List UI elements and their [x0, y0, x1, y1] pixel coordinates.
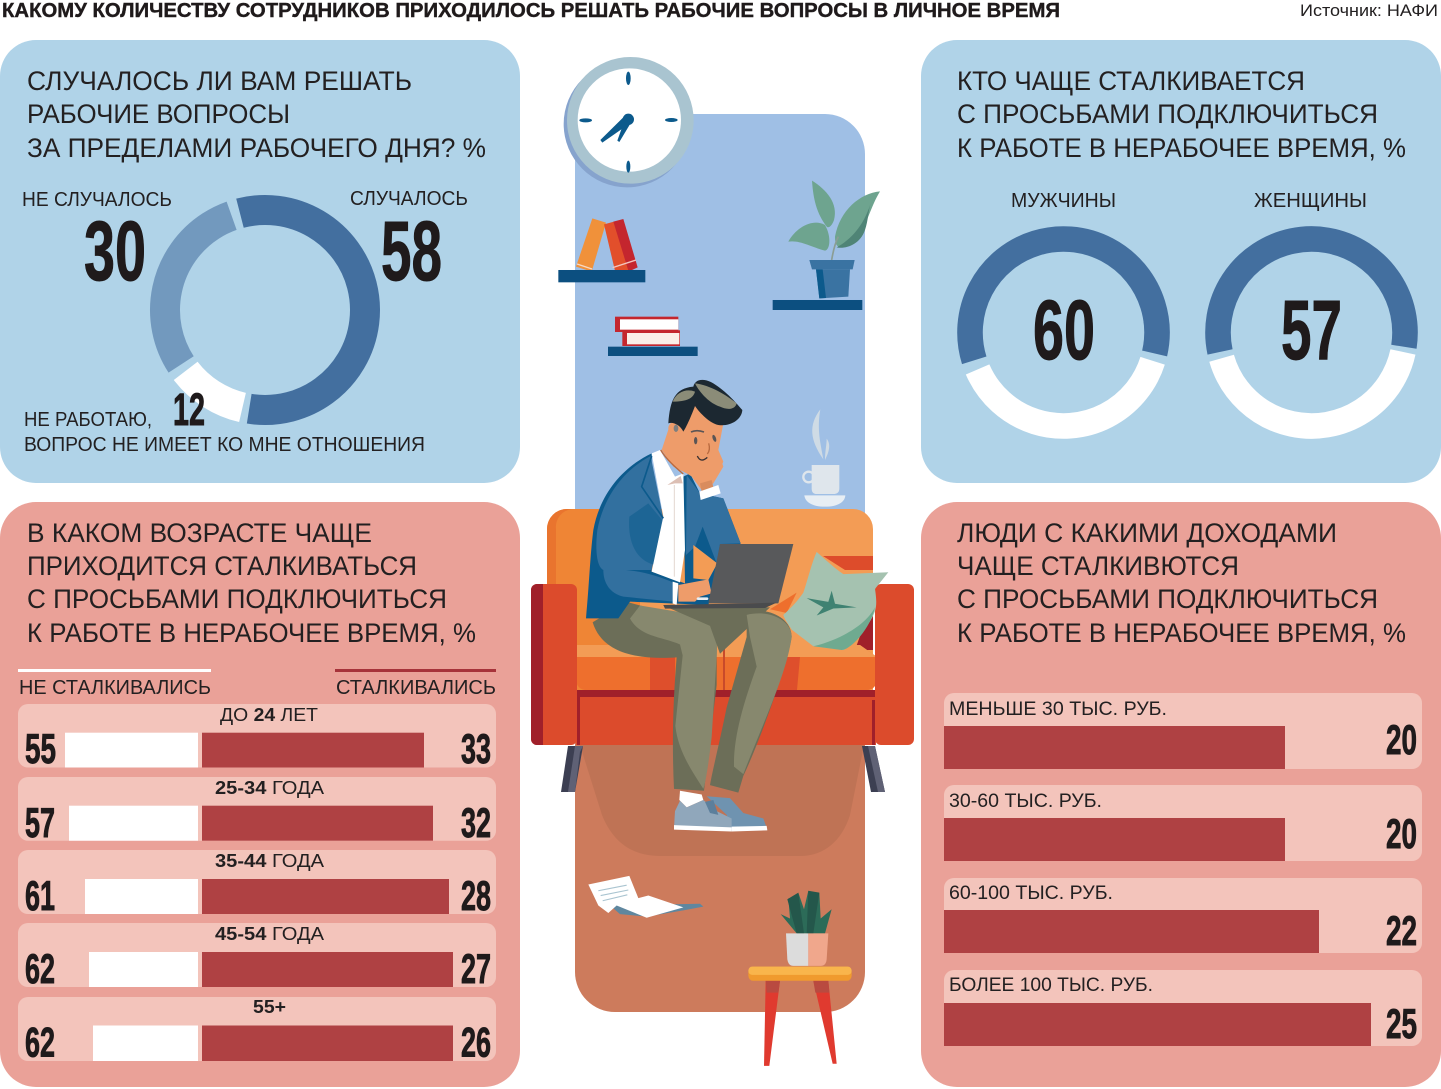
heading: panel question: С ПРОСЬБАМИ ПОДКЛЮЧИТЬСЯ — [27, 584, 447, 614]
donut chart: women 57 — [1201, 190, 1422, 443]
panel: by age — [0, 502, 520, 1087]
icon: stacked books on shelf — [608, 317, 698, 356]
hair — [668, 380, 742, 432]
sofa back — [547, 509, 873, 709]
heading: panel question — [957, 66, 1406, 163]
heading: panel question: ЗА ПРЕДЕЛАМИ РАБОЧЕГО ДНЯ? % — [27, 133, 486, 163]
row: over 100k: 25 — [1386, 1000, 1417, 1047]
row: 45-54 — [18, 923, 496, 992]
heading: panel question — [27, 518, 476, 648]
icon: sheets of paper on floor — [588, 876, 703, 918]
row: 25-34: 32 — [461, 799, 491, 846]
heading: panel question: К РАБОТЕ В НЕРАБОЧЕЕ ВРЕМЯ, % — [957, 618, 1406, 648]
heading: panel question: В КАКОМ ВОЗРАСТЕ ЧАЩЕ — [27, 518, 372, 548]
row: 30-60k: 20 — [1386, 810, 1417, 857]
label: not working 12 — [24, 384, 425, 456]
label: not working 12: НЕ РАБОТАЮ, — [24, 409, 152, 431]
man: legs and shoes — [593, 602, 792, 831]
row: under 24: 33 — [461, 725, 491, 772]
row: 55+: 26 — [461, 1018, 491, 1066]
donut chart: men 60: МУЖЧИНЫ — [1011, 190, 1116, 212]
row: 45-54: 62 — [25, 945, 55, 992]
sofa — [531, 509, 914, 792]
facial features — [694, 437, 697, 444]
row: 35-44 — [18, 850, 496, 919]
heading: panel question: ЛЮДИ С КАКИМИ ДОХОДАМИ — [957, 518, 1337, 548]
heading: panel question: КТО ЧАЩЕ СТАЛКИВАЕТСЯ — [957, 66, 1305, 96]
label: did not happen 30: НЕ СЛУЧАЛОСЬ — [22, 189, 172, 211]
illustration: man with laptop in a room — [531, 57, 914, 1066]
title: КАКОМУ КОЛИЧЕСТВУ СОТРУДНИКОВ ПРИХОДИЛОСЬ РЕШАТЬ РАБОЧИЕ ВОПРОСЫ В ЛИЧНОЕ ВРЕМЯ — [2, 0, 1060, 22]
row: under 30k: МЕНЬШЕ 30 ТЫС. РУБ. — [949, 699, 1167, 720]
row: 35-44: 28 — [461, 872, 491, 919]
icon: leaning books on shelf — [558, 218, 645, 282]
label: did not happen 30 — [22, 189, 172, 298]
heading: panel question: ПРИХОДИТСЯ СТАЛКИВАТЬСЯ — [27, 551, 417, 581]
row: under 24: 55 — [25, 725, 56, 772]
label: did not happen 30: 30 — [84, 204, 146, 298]
row: over 100k: БОЛЕЕ 100 ТЫС. РУБ. — [949, 975, 1153, 996]
floor shadow — [580, 745, 864, 856]
row: 35-44: 61 — [25, 872, 55, 919]
heading: panel question: ЧАЩЕ СТАЛКИВЮТСЯ — [957, 551, 1239, 581]
row: under 24 — [18, 704, 496, 772]
label: happened 58: 58 — [381, 204, 442, 298]
donut chart: men 60: 60 — [1033, 283, 1095, 377]
heading: panel question — [957, 518, 1406, 648]
row: 30-60k — [944, 785, 1422, 861]
wall decor — [558, 57, 880, 507]
label: not working 12: ВОПРОС НЕ ИМЕЕТ КО МНЕ ОТНОШЕНИЯ — [24, 434, 425, 456]
legs — [561, 746, 583, 792]
panel: who is asked more often, by gender — [921, 40, 1441, 483]
legend: СТАЛКИВАЛИСЬ — [336, 676, 496, 699]
heading: panel question: К РАБОТЕ В НЕРАБОЧЕЕ ВРЕМЯ, % — [957, 133, 1406, 163]
panel: by income — [921, 502, 1441, 1087]
lapel — [642, 456, 663, 518]
heading: panel question: РАБОЧИЕ ВОПРОСЫ — [27, 99, 290, 129]
legend: НЕ СТАЛКИВАЛИСЬ — [19, 676, 211, 699]
row: 60-100k: 22 — [1386, 907, 1417, 954]
icon: plant on a stool — [748, 891, 852, 1066]
donut chart: 58 / 30 / 12 — [127, 172, 403, 448]
floor — [575, 740, 865, 1012]
source: Источник: НАФИ — [1300, 1, 1438, 20]
row: 25-34: 57 — [25, 799, 55, 846]
row: 45-54: 27 — [461, 945, 491, 992]
icon: potted plant on shelf — [773, 181, 880, 310]
left arm — [531, 584, 577, 745]
label: not working 12: 12 — [173, 384, 205, 435]
heading: panel question — [27, 66, 486, 163]
row: 30-60k: 30-60 ТЫС. РУБ. — [949, 791, 1102, 812]
row: 55+: 62 — [25, 1018, 55, 1066]
legend — [18, 669, 496, 699]
laptop — [708, 544, 793, 603]
row: 45-54: 45-54 ГОДА — [215, 924, 324, 944]
row: 60-100k — [944, 878, 1422, 954]
hand on keyboard — [678, 579, 712, 602]
icon: coffee cup with steam — [803, 409, 845, 507]
sofa front rail — [576, 697, 876, 745]
label: happened 58: СЛУЧАЛОСЬ — [350, 188, 468, 210]
wall backdrop — [575, 114, 865, 520]
row: over 100k — [944, 970, 1422, 1047]
man: torso, head and laptop — [586, 380, 793, 618]
donut chart: women 57: ЖЕНЩИНЫ — [1254, 190, 1367, 212]
heading: panel question: С ПРОСЬБАМИ ПОДКЛЮЧИТЬСЯ — [957, 99, 1378, 129]
row: 60-100k: 60-100 ТЫС. РУБ. — [949, 883, 1113, 904]
row: under 24: ДО 24 ЛЕТ — [220, 705, 318, 725]
row: 25-34: 25-34 ГОДА — [215, 778, 324, 798]
label: happened 58 — [350, 188, 468, 298]
heading: panel question: С ПРОСЬБАМИ ПОДКЛЮЧИТЬСЯ — [957, 584, 1378, 614]
donut chart: women 57: 57 — [1281, 283, 1342, 377]
panel: did you handle work questions outside the working day — [0, 40, 520, 483]
right arm — [875, 584, 914, 745]
row: under 30k: 20 — [1386, 716, 1417, 763]
icon: clock — [564, 57, 694, 187]
cushion — [770, 552, 888, 650]
row: 55+: 55+ — [253, 997, 286, 1017]
row: 35-44: 35-44 ГОДА — [215, 851, 324, 871]
gap between arm and body — [693, 545, 717, 580]
jacket — [586, 453, 741, 618]
hand on cheek and cuff — [692, 452, 723, 490]
row: 25-34 — [18, 777, 496, 846]
seat cushions — [576, 645, 877, 690]
row: under 30k — [944, 693, 1422, 769]
face and neck — [662, 405, 723, 482]
shirt — [652, 450, 685, 582]
heading: panel question: К РАБОТЕ В НЕРАБОЧЕЕ ВРЕМЯ, % — [27, 618, 476, 648]
sleeve — [603, 569, 675, 602]
heading: panel question: СЛУЧАЛОСЬ ЛИ ВАМ РЕШАТЬ — [27, 66, 412, 96]
row: 55+ — [18, 997, 496, 1066]
donut chart: men 60 — [946, 190, 1181, 450]
